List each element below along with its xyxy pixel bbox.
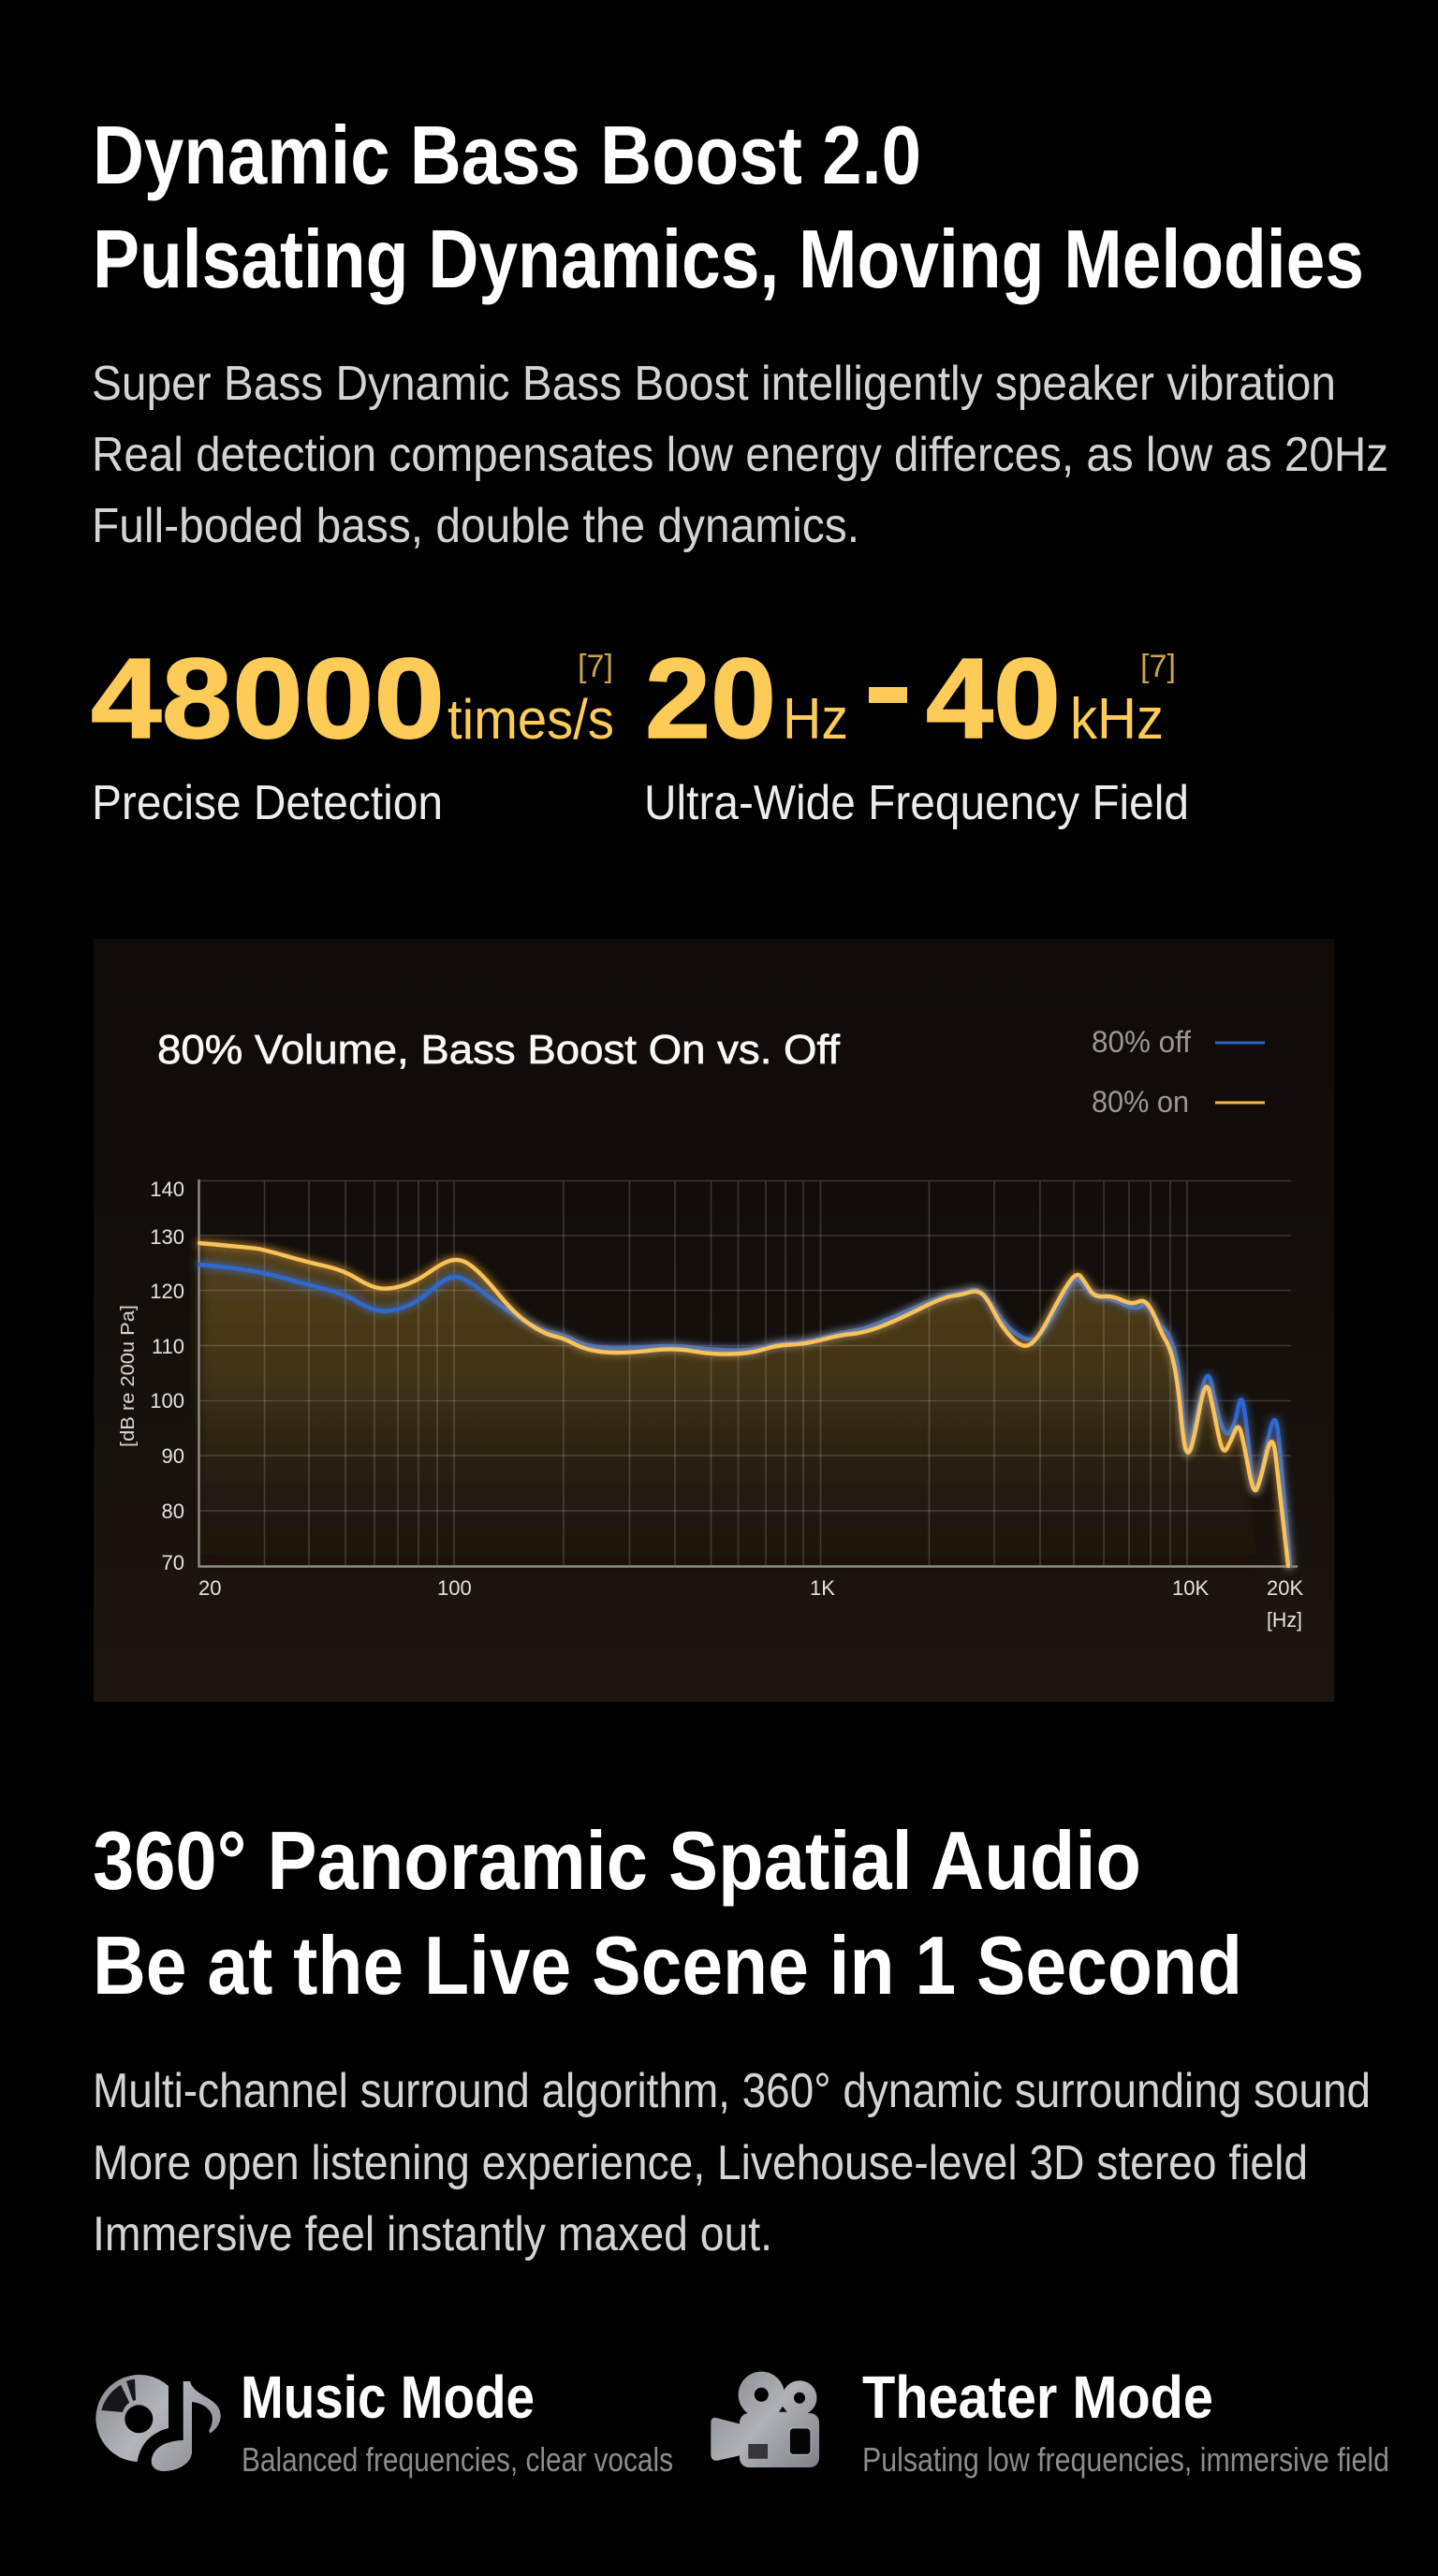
heading: spatial audio xyxy=(93,1814,1242,2012)
stat: precise detection xyxy=(91,635,614,830)
icon: film camera xyxy=(711,2372,819,2467)
axes xyxy=(198,1179,1298,1567)
heading: dynamic bass boost xyxy=(93,109,1364,305)
y axis labels: 110 xyxy=(152,1335,184,1358)
grid lines xyxy=(198,1181,1291,1565)
stat: ultra-wide frequency field: 20 xyxy=(645,635,776,762)
stat: precise detection: [7] xyxy=(578,649,613,684)
x axis labels xyxy=(198,1576,1303,1632)
y axis labels: 130 xyxy=(150,1225,184,1249)
stat: ultra-wide frequency field: kHz xyxy=(1070,687,1164,752)
text block: spatial audio description xyxy=(93,2064,1371,2261)
mode: music xyxy=(241,2364,673,2479)
x axis labels: 10K xyxy=(1172,1576,1209,1600)
panel: frequency response chart xyxy=(94,939,1334,1702)
heading: spatial audio: 360° Panoramic Spatial Audio xyxy=(93,1814,1141,1907)
text block: bass boost description xyxy=(92,357,1388,553)
stat: ultra-wide frequency field: [7] xyxy=(1140,649,1176,684)
legend: 80% off xyxy=(1092,1025,1191,1059)
stat: precise detection: Precise Detection xyxy=(92,776,443,830)
text block: bass boost description: Super Bass Dynamic Bass Boost intelligently speaker vibration xyxy=(92,357,1336,411)
heading: spatial audio: Be at the Live Scene in 1 Second xyxy=(93,1919,1242,2012)
stat: ultra-wide frequency field: Hz xyxy=(783,687,848,752)
x axis labels: 1K xyxy=(810,1576,835,1600)
mode: music: Music Mode xyxy=(241,2364,535,2431)
y axis labels: 70 xyxy=(162,1551,184,1574)
chart title: 80% Volume, Bass Boost On vs. Off xyxy=(157,1027,841,1073)
heading: dynamic bass boost: Dynamic Bass Boost 2.0 xyxy=(93,109,921,201)
chart area fill xyxy=(199,1243,1259,1566)
mode: theater: Theater Mode xyxy=(862,2364,1213,2431)
y axis title: [dB re 200u Pa] xyxy=(118,1305,139,1447)
y axis labels: 100 xyxy=(150,1389,184,1412)
text block: bass boost description: Full-boded bass, double the dynamics. xyxy=(92,499,859,553)
mode: theater xyxy=(862,2364,1389,2479)
y axis labels: 90 xyxy=(162,1444,184,1468)
stat: precise detection: 48000 xyxy=(91,635,445,762)
stat: precise detection: times/s xyxy=(448,688,614,751)
stat: ultra-wide frequency field: 40 xyxy=(926,635,1061,762)
x axis labels: 20K xyxy=(1267,1576,1303,1600)
text block: spatial audio description: Immersive feel instantly maxed out. xyxy=(93,2207,772,2261)
x axis labels: [Hz] xyxy=(1267,1608,1302,1632)
x axis labels: 20 xyxy=(198,1576,221,1600)
y axis labels: 120 xyxy=(150,1280,184,1303)
stat: ultra-wide frequency field xyxy=(644,635,1189,830)
curve: 80% off (blue) xyxy=(199,1265,1290,1566)
legend xyxy=(1092,1025,1265,1119)
stat: ultra-wide frequency field: Ultra-Wide Frequency Field xyxy=(644,776,1189,830)
curve: 80% on (orange) xyxy=(199,1243,1288,1566)
text block: spatial audio description: More open listening experience, Livehouse-level 3D stereo field xyxy=(93,2136,1308,2190)
y axis labels: 140 xyxy=(150,1178,184,1201)
icon: music disc and note xyxy=(95,2375,221,2471)
y axis labels xyxy=(150,1178,184,1574)
legend: 80% on xyxy=(1092,1085,1189,1119)
mode: music: Balanced frequencies, clear vocals xyxy=(242,2440,673,2479)
x axis labels: 100 xyxy=(437,1576,472,1600)
y axis labels: 80 xyxy=(162,1500,184,1523)
